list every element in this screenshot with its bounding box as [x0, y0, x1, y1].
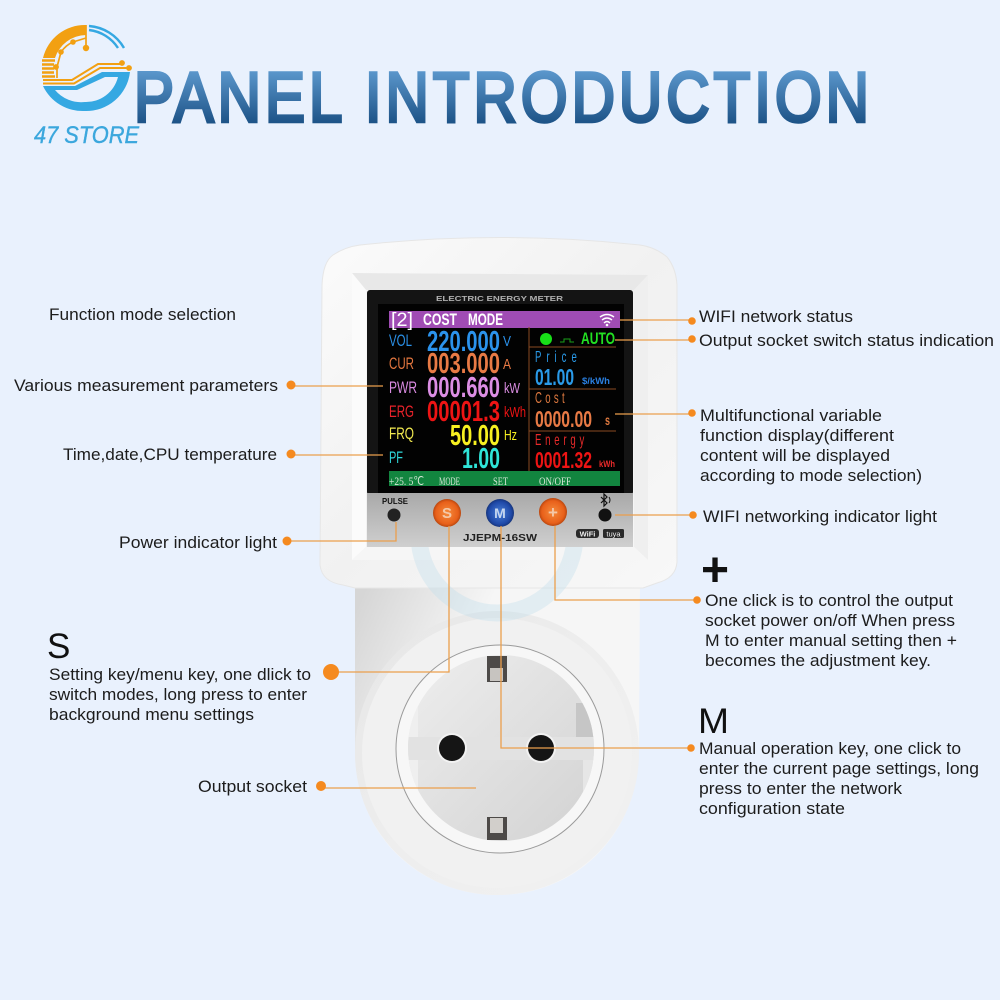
control panel: [367, 493, 633, 547]
callout: plus key: +: [701, 544, 729, 597]
control panel: WiFi: [580, 530, 595, 538]
readings: kWh: [504, 404, 526, 421]
callout: plus key: One click is to control the output: [705, 592, 953, 610]
callout: multifunctional display: Multifunctional variable: [700, 407, 882, 425]
mode panel: $/kWh: [582, 376, 610, 387]
callout: M key: press to enter the network: [699, 780, 903, 798]
screen: COST: [423, 310, 457, 329]
callout: multifunctional display: content will be displayed: [700, 447, 890, 465]
callout: plus key: [701, 544, 957, 670]
mode panel: 0000.00: [535, 406, 592, 432]
mode panel: Cost: [535, 388, 568, 407]
mode panel: 0001.32: [535, 447, 592, 473]
control panel: JJEPM-16SW: [463, 532, 537, 544]
callout: S key: Setting key/menu key, one dlick to: [49, 666, 311, 684]
callout: plus key: becomes the adjustment key.: [705, 652, 931, 670]
callout: S key: switch modes, long press to enter: [49, 686, 308, 704]
mode panel: AUTO: [581, 329, 615, 348]
callout: M key: [698, 702, 979, 818]
callout: plus key: socket power on/off When press: [705, 612, 955, 630]
device stem: [355, 575, 640, 895]
control panel: tuya: [606, 530, 621, 538]
control panel: M: [494, 505, 506, 521]
callout: plus key: M to enter manual setting then +: [705, 632, 957, 650]
screen: [367, 290, 633, 495]
bezel: [352, 273, 648, 560]
callout: multifunctional display: function display(different: [700, 427, 894, 445]
readings: A: [503, 356, 511, 373]
readings: kW: [504, 380, 521, 397]
screen: ON/OFF: [539, 474, 571, 488]
mode panel: Energy: [535, 430, 588, 449]
control panel: S: [442, 505, 452, 522]
readings: Hz: [504, 427, 517, 444]
control panel: +: [548, 503, 558, 522]
callout: multifunctional display: according to mode selection): [700, 467, 922, 485]
readings: ERG: [389, 403, 414, 421]
callout: M key: enter the current page settings, long: [699, 760, 979, 778]
mode panel: s: [605, 412, 610, 428]
screen: SET: [493, 474, 508, 488]
screen: [2]: [391, 310, 413, 331]
readings: PWR: [389, 379, 417, 397]
readings: 220.000: [427, 326, 500, 358]
readings: PF: [389, 449, 403, 467]
readings: FRQ: [389, 425, 414, 443]
socket: [362, 612, 638, 854]
screen: ELECTRIC ENERGY METER: [436, 294, 564, 303]
readings: 00001.3: [427, 396, 500, 428]
label: function mode selection: Function mode selection: [49, 306, 236, 324]
label: output socket switch status: Output socket switch status indication: [699, 332, 994, 350]
label: time, date, CPU temperature: Time,date,CPU temperature: [63, 446, 277, 464]
mode panel: kWh: [599, 459, 615, 470]
readings: [389, 326, 526, 475]
label: power indicator light: Power indicator light: [119, 534, 277, 552]
readings: 1.00: [462, 443, 500, 475]
logo: 47 STORE: [34, 25, 140, 149]
callout: S key: background menu settings: [49, 706, 254, 724]
readings: VOL: [389, 332, 412, 350]
readings: 003.000: [427, 348, 500, 380]
label: various measurement parameters: Various measurement parameters: [14, 377, 278, 395]
watermark ring: [419, 457, 575, 613]
screen: MODE: [468, 310, 503, 329]
callout: M key: M: [698, 702, 729, 741]
readings: 000.660: [427, 372, 500, 404]
device shell: [320, 238, 677, 588]
readings: 50.00: [450, 420, 500, 452]
callout: M key: Manual operation key, one click to: [699, 740, 961, 758]
callout: multifunctional display: [700, 407, 922, 485]
label: WIFI network status: WIFI network status: [699, 308, 853, 326]
callout: S key: [47, 627, 311, 724]
mode panel: Price: [535, 347, 582, 366]
mode panel: 01.00: [535, 364, 574, 390]
mode panel: [529, 327, 616, 474]
readings: V: [503, 333, 511, 350]
logo: 47 STORE: 47 STORE: [34, 122, 140, 149]
control panel: PULSE: [382, 496, 408, 506]
device: energy meter plug: [320, 238, 677, 895]
label: WIFI networking indicator: WIFI networking indicator light: [703, 508, 937, 526]
title: PANEL INTRODUCTION: [134, 58, 869, 137]
label: output socket: Output socket: [198, 778, 307, 796]
screen: MODE: [439, 474, 460, 488]
callout: S key: S: [47, 627, 70, 666]
readings: CUR: [389, 355, 414, 373]
leader lines: [282, 317, 701, 791]
callout: M key: configuration state: [699, 800, 845, 818]
screen: +25. 5℃: [389, 474, 424, 488]
status bar: [389, 471, 620, 486]
